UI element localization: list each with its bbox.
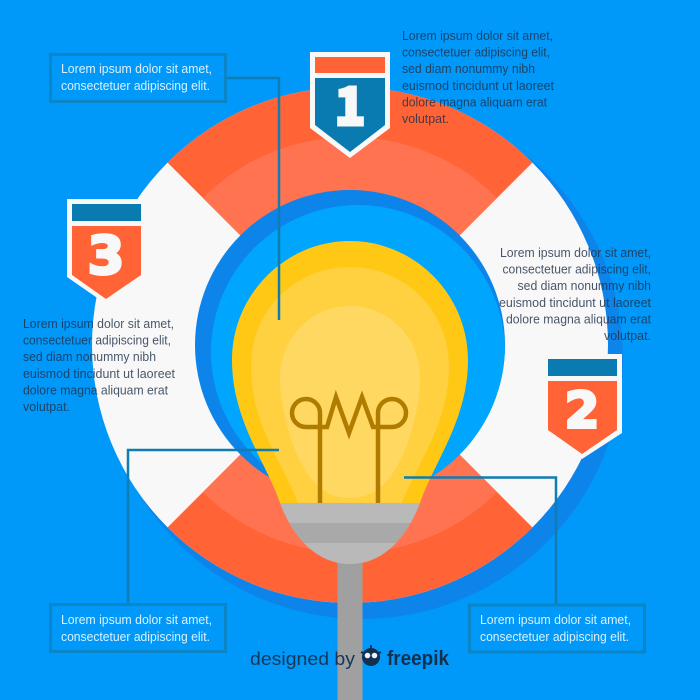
callout: bottom right — [470, 605, 644, 652]
attribution: designed by freepik: freepik — [387, 648, 450, 670]
text block: right: euismod tincidunt ut laoreet — [499, 296, 652, 310]
text block: right — [499, 246, 652, 343]
text block: left: consectetuer adipiscing elit, — [23, 334, 171, 348]
ring inner hole — [195, 190, 505, 478]
text block: right: consectetuer adipiscing elit, — [502, 262, 651, 276]
orange segments — [168, 90, 532, 603]
text block: right: sed diam nonummy nibh — [518, 279, 651, 293]
badge 2 — [543, 354, 622, 459]
socket — [280, 503, 420, 564]
badge 3 — [67, 199, 146, 304]
badge 1: 1 — [335, 66, 365, 140]
attribution: designed by freepik — [250, 645, 450, 670]
bulb glass inner — [280, 306, 420, 498]
text block: left — [23, 317, 176, 414]
callout: bottom right: Lorem ipsum dolor sit amet, — [480, 613, 631, 627]
text block: top right: volutpat. — [402, 112, 449, 126]
attribution: designed by freepik: designed by — [250, 648, 356, 669]
connector: bottom left — [128, 450, 279, 603]
callout: top left: Lorem ipsum dolor sit amet, — [61, 62, 212, 76]
text block: top right: euismod tincidunt ut laoreet — [402, 79, 555, 93]
bulb glass middle — [251, 267, 449, 503]
callout: bottom right: consectetuer adipiscing elit. — [480, 630, 629, 644]
text block: top right: consectetuer adipiscing elit, — [402, 46, 550, 60]
connector: bottom right — [404, 478, 556, 604]
text block: top right: sed diam nonummy nibh — [402, 62, 535, 76]
text block: right: volutpat. — [604, 329, 651, 343]
stem — [338, 555, 362, 700]
text block: left: Lorem ipsum dolor sit amet, — [23, 317, 174, 331]
badge 2: 2 — [565, 382, 599, 440]
text block: left: sed diam nonummy nibh — [23, 350, 156, 364]
text block: left: euismod tincidunt ut laoreet — [23, 367, 176, 381]
text block: top right: Lorem ipsum dolor sit amet, — [402, 29, 553, 43]
filament — [292, 397, 406, 503]
text block: left: dolore magna aliquam erat — [23, 384, 169, 398]
text block: left: volutpat. — [23, 400, 70, 414]
callout: bottom left — [50, 604, 226, 652]
badge 1 — [310, 52, 390, 158]
callout: top left: consectetuer adipiscing elit. — [61, 79, 210, 93]
callout: bottom left: consectetuer adipiscing elit. — [61, 630, 210, 644]
bulb glass outer — [232, 241, 468, 503]
callout: top left — [50, 54, 226, 102]
connector: top left — [226, 78, 279, 320]
text block: right: dolore magna aliquam erat — [506, 312, 652, 326]
light bulb — [232, 241, 468, 565]
text block: right: Lorem ipsum dolor sit amet, — [500, 246, 651, 260]
ring white body — [92, 87, 608, 603]
ring shadow — [101, 97, 623, 619]
lifebuoy ring — [92, 87, 623, 619]
text block: top right: dolore magna aliquam erat — [402, 96, 548, 110]
badge 3: 3 — [88, 226, 124, 287]
icon: freepik mascot — [361, 645, 381, 666]
text block: top right — [402, 29, 555, 126]
callout: bottom left: Lorem ipsum dolor sit amet, — [61, 613, 212, 627]
